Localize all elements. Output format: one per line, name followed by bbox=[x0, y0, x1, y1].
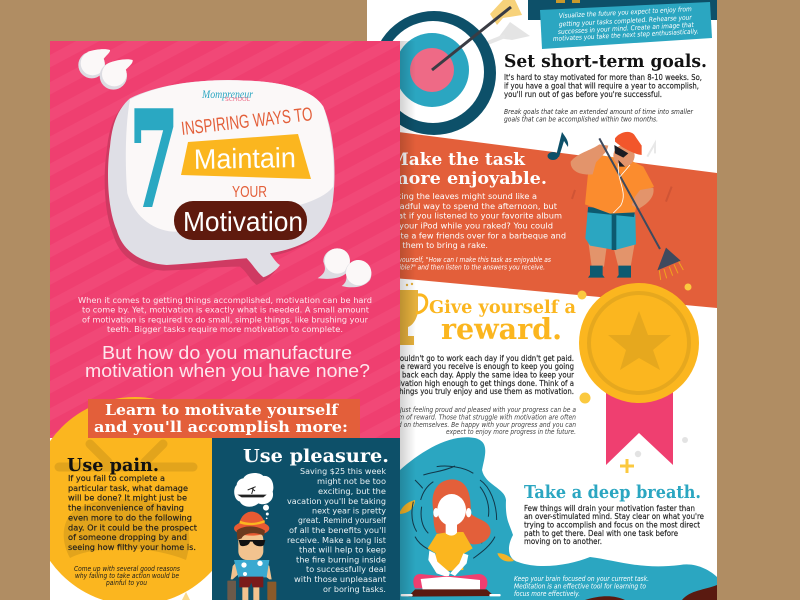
text: set short-term goals body: you'll run out of gas before you're successful. bbox=[504, 89, 662, 99]
text: make the task body bbox=[385, 191, 566, 272]
illustration: tourist with thought bubble bbox=[227, 473, 276, 600]
text: use pleasure body: Saving $25 this week bbox=[300, 466, 386, 476]
text: take a deep breath body: moving on to another. bbox=[524, 536, 602, 546]
banner: learn to motivate yourself bbox=[88, 399, 360, 438]
text: set short-term goals body: Break goals that take an extended amount of time into smaller bbox=[504, 108, 694, 116]
text: use pleasure body: great. Remind yourself bbox=[298, 515, 387, 525]
text: use pain body: even more to do the following bbox=[68, 512, 192, 522]
text: question heading: motivation when you have none? bbox=[85, 360, 370, 381]
icon: faint watermark bbox=[59, 444, 193, 560]
text: question heading: But how do you manufacture bbox=[102, 342, 352, 363]
icon: trophy bbox=[392, 283, 427, 345]
heading: use pain: Use pain. bbox=[67, 455, 159, 476]
text: use pain body: If you fail to complete a bbox=[68, 473, 165, 483]
text: make the task body: ask them to bring a rake. bbox=[386, 240, 488, 250]
heading: give yourself a reward: Give yourself a bbox=[429, 298, 576, 318]
panel: use pain yellow circle bbox=[50, 397, 212, 600]
text: use pleasure body: or boring tasks. bbox=[323, 584, 386, 594]
text: take a deep breath body: an over-stimulated mind. Stay clear on what you're bbox=[524, 511, 704, 521]
decorative dots and plus bbox=[578, 284, 692, 473]
text: set short-term goals body: goals that can be accomplished within two months. bbox=[504, 116, 658, 124]
right page bbox=[367, 0, 717, 600]
text: set short-term goals body: if you have a goal that will require a year to accomplish, bbox=[504, 80, 699, 90]
heading: give yourself a reward: reward. bbox=[441, 312, 562, 346]
text: intro paragraph: of motivation is required to do small, simple things, like brushing your bbox=[82, 314, 369, 324]
heading: make the task more enjoyable: Make the task bbox=[390, 150, 526, 170]
panel: teal meditation blob bbox=[367, 437, 717, 600]
visualize banner bbox=[528, 0, 717, 49]
text: intro paragraph: teeth. Bigger tasks require more motivation to complete. bbox=[107, 324, 343, 334]
logo: Mompreneur School bbox=[202, 90, 253, 101]
text: take a deep breath body: path to get there. Deal with one task before bbox=[524, 528, 678, 538]
text: use pain tip: why failing to take action would be bbox=[75, 572, 179, 580]
text: use pain body: day. Or it could be the prospect bbox=[68, 522, 198, 532]
banner: learn to motivate yourself: and you'll accomplish more: bbox=[94, 418, 348, 436]
text: give yourself a reward body: Just feeling proud and pleased with your progress can be a bbox=[398, 406, 576, 414]
text: give yourself a reward body bbox=[379, 353, 576, 436]
visualize banner: motivates you take the next step enthusiastically. bbox=[553, 27, 699, 43]
text: set short-term goals body bbox=[504, 72, 702, 124]
heading: your: YOUR bbox=[232, 184, 267, 201]
text: intro paragraph bbox=[78, 295, 372, 334]
text: meditation tip: Meditation is an effective tool for learning to bbox=[514, 582, 646, 590]
panel: make the task enjoyable band bbox=[367, 128, 717, 308]
text: use pleasure body: to successfully deal bbox=[306, 564, 386, 574]
text: use pleasure body: that will help to keep bbox=[299, 545, 386, 555]
icon: top quotation marks bbox=[78, 49, 133, 90]
dark pill: motivation: Motivation bbox=[183, 206, 303, 237]
text: use pleasure body: of all the benefits you'll bbox=[289, 525, 386, 535]
heading: make the task more enjoyable: more enjoyable. bbox=[390, 169, 547, 189]
text: give yourself a reward body: expect to enjoy more progress in the future. bbox=[446, 428, 576, 436]
text: use pleasure body: with those unpleasant bbox=[294, 574, 387, 584]
text: use pain body: the inconvenience of having bbox=[68, 503, 184, 513]
text: use pain body: of someone dropping by and bbox=[68, 532, 187, 542]
heading: take a deep breath: Take a deep breath. bbox=[524, 482, 701, 503]
text: intro paragraph: to come by. Yet, motivation is exactly what is needed. A small amount bbox=[82, 304, 370, 314]
text: make the task body: on your iPod while you raked? You could bbox=[386, 221, 553, 231]
heading: set short-term goals: Set short-term goals. bbox=[504, 51, 707, 72]
visualize banner: successes in your mind. Create an image that bbox=[558, 21, 694, 36]
text: make the task body: what if you listened to your favorite album bbox=[386, 211, 562, 221]
visualize banner: Visualize the future you expect to enjoy from bbox=[559, 5, 692, 20]
text: make the task body: invite a few friends over for a barbeque and bbox=[386, 231, 566, 241]
text: give yourself a reward body: few things you truly enjoy and use them as motivation. bbox=[382, 386, 574, 396]
icon: gold medal with ribbon bbox=[579, 283, 699, 465]
left page bbox=[31, 41, 400, 600]
yellow banner: maintain bbox=[181, 134, 311, 179]
text: set short-term goals body: It's hard to stay motivated for more than 8-10 weeks. So, bbox=[504, 72, 702, 82]
illustration: man raking with earphones bbox=[571, 132, 683, 280]
text: question heading bbox=[85, 342, 370, 381]
text: meditation tip bbox=[514, 575, 649, 598]
heading: make the task more enjoyable bbox=[390, 150, 547, 189]
text: take a deep breath body: trying to accomplish and focus on the most direct bbox=[524, 520, 701, 530]
text: take a deep breath body: Few things will drain your motivation faster than bbox=[524, 503, 695, 513]
text: meditation tip: Keep your brain focused on your current task. bbox=[514, 575, 649, 583]
numeral 7: 7 bbox=[130, 83, 178, 236]
text: use pleasure body: next year is pretty bbox=[312, 506, 386, 516]
logo: Mompreneur School: SCHOOL bbox=[225, 97, 250, 103]
text: intro paragraph: When it comes to getting things accomplished, motivation can be hard bbox=[78, 295, 372, 305]
text: take a deep breath body bbox=[524, 503, 704, 546]
text: use pleasure body: vacation you'll be taking bbox=[287, 496, 386, 506]
illustration: speech bubble with title bbox=[105, 80, 335, 285]
yellow banner: maintain: Maintain bbox=[194, 142, 296, 175]
text: use pleasure body: might not be too bbox=[317, 476, 386, 486]
illustration: meditating woman bbox=[400, 466, 514, 597]
text: use pleasure body: exciting, but the bbox=[318, 486, 386, 496]
shadow cast by the left page bbox=[400, 41, 416, 600]
text: make the task body: possible?" and then listen to the answers you receive. bbox=[385, 264, 545, 272]
panel: use pleasure navy bbox=[212, 438, 400, 600]
text: give yourself a reward body: form of reward. Those that struggle with motivation are often bbox=[390, 414, 576, 422]
text: use pleasure body: receive. Make a long list bbox=[287, 535, 387, 545]
dark bottom corner bbox=[585, 585, 717, 600]
text: use pain body bbox=[68, 473, 198, 552]
text: meditation tip: focus more effectively. bbox=[514, 590, 580, 598]
text: use pain body: seeing how filthy your home is. bbox=[68, 542, 196, 552]
text: use pain tip: Come up with several good reasons bbox=[74, 565, 180, 573]
text: give yourself a reward body: You wouldn't go to work each day if you didn't get paid. bbox=[379, 353, 574, 363]
heading: give yourself a reward bbox=[429, 298, 576, 346]
text: use pleasure body bbox=[287, 466, 387, 594]
banner: learn to motivate yourself: Learn to motivate yourself bbox=[105, 401, 340, 419]
heading: inspiring ways to: INSPIRING WAYS TO bbox=[180, 104, 314, 140]
icon: music note bbox=[548, 132, 568, 160]
text: use pain tip: painful to you bbox=[105, 579, 147, 587]
text: use pain body: will be done? It might just be bbox=[68, 493, 187, 503]
logo: Mompreneur School: Mompreneur bbox=[201, 87, 253, 101]
text: use pain body: particular task, what damage bbox=[68, 483, 188, 493]
icon: target with arrow bbox=[372, 0, 530, 135]
heading: use pleasure: Use pleasure. bbox=[243, 447, 389, 467]
visualize banner: getting your tasks completed. Rehearse your bbox=[559, 13, 693, 28]
text: make the task body: dreadful way to spend the afternoon, but bbox=[386, 201, 558, 211]
text: give yourself a reward body: The reward you receive is enough to keep you going bbox=[391, 361, 574, 371]
text: use pleasure body: the fire burning inside bbox=[296, 554, 386, 564]
text: use pain tip bbox=[74, 565, 180, 587]
text: make the task body: Ask yourself, "How can I make this task as enjoyable as bbox=[385, 256, 551, 264]
text: give yourself a reward body: hard on themselves. Be happy with your progress and you can bbox=[388, 421, 576, 429]
text: make the task body: Raking the leaves might sound like a bbox=[386, 191, 537, 201]
icon: bottom quotation marks bbox=[318, 248, 371, 287]
panel: pink page background bbox=[50, 41, 400, 438]
text: give yourself a reward body: motivation high enough to get things done. Think of a bbox=[385, 378, 574, 388]
text: give yourself a reward body: back each day. Apply the same idea to keep your bbox=[402, 370, 574, 380]
